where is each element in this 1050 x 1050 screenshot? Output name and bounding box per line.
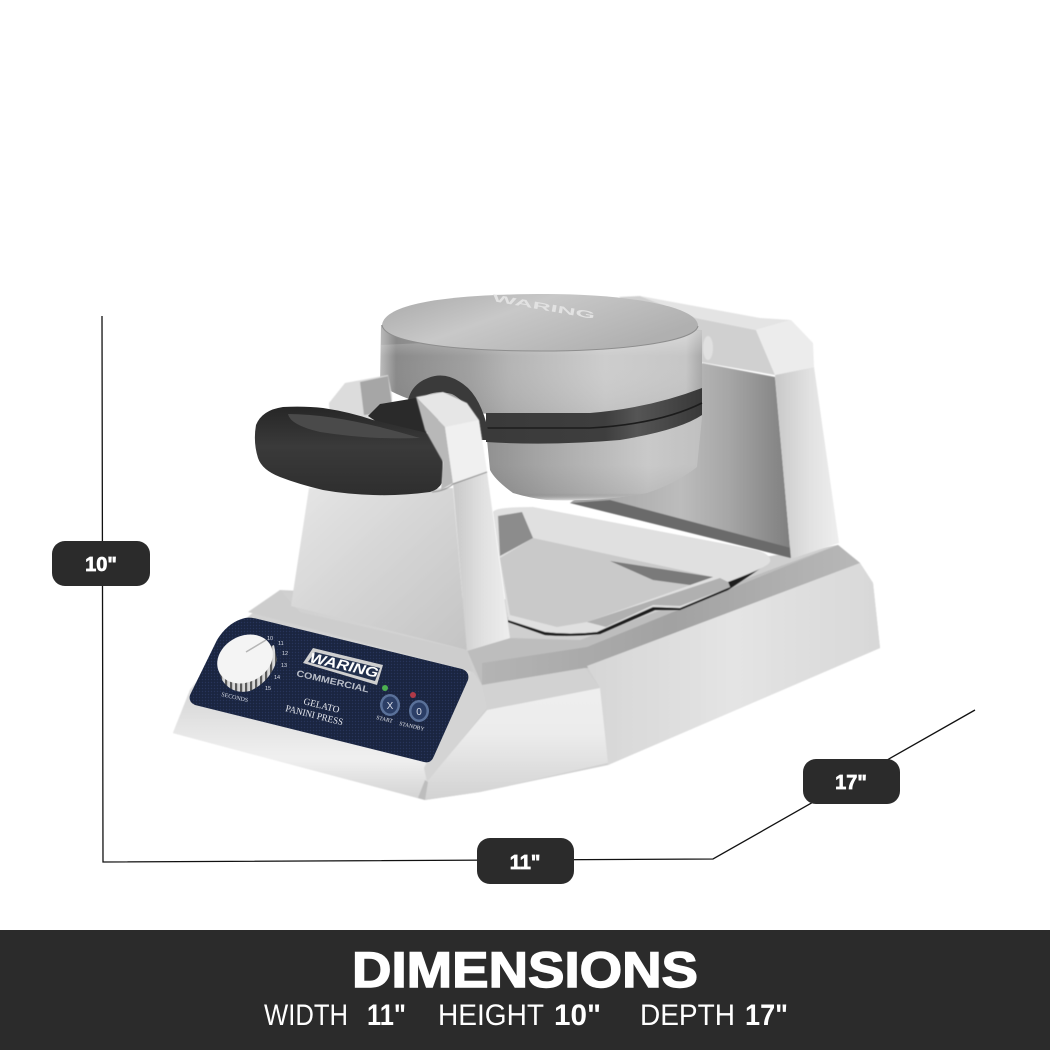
timer scale: 11: [278, 641, 284, 647]
handle bracket cap: [416, 392, 487, 492]
front facet around the panel: [173, 590, 473, 800]
dimension lines: [102, 316, 975, 862]
width callout: 11": [510, 852, 540, 874]
control panel: [190, 618, 468, 762]
start button: START: [376, 715, 394, 725]
drip tray: [493, 507, 770, 636]
standby button: [399, 692, 429, 733]
Waring logo: COMMERCIAL: [296, 668, 370, 695]
timer scale: 14: [274, 675, 280, 681]
footer title: DIMENSIONS: [352, 942, 698, 998]
base plinth: [173, 545, 880, 800]
left upright support: [291, 375, 510, 651]
timer scale: 10: [267, 636, 273, 642]
start button: [376, 685, 400, 725]
product name: PANINI PRESS: [284, 704, 344, 728]
upper lid with dark seal bands: [380, 293, 702, 444]
timer scale: [265, 636, 288, 692]
footer measurements: HEIGHT: [438, 999, 544, 1032]
lower cooking plate: [487, 412, 702, 500]
depth callout: [803, 759, 900, 804]
product name: GELATO: [302, 697, 341, 716]
engraved brand on lid: WARING: [491, 293, 596, 322]
top surface bevel: [467, 545, 860, 685]
start button: X: [387, 701, 394, 712]
timer scale: 12: [282, 651, 288, 657]
height callout: 10": [85, 554, 117, 576]
footer measurements: DEPTH: [640, 999, 735, 1032]
waffle maker product illustration: [173, 293, 880, 800]
right upright support: [570, 296, 839, 559]
height callout: [52, 541, 150, 586]
seconds label: SECONDS: [221, 692, 249, 704]
timer knob: [209, 625, 281, 693]
standby button: STANDBY: [399, 721, 425, 733]
footer measurements: 17": [745, 999, 788, 1032]
standby button: 0: [416, 707, 422, 718]
seal bands: [486, 388, 702, 444]
footer measurements: 10": [554, 999, 601, 1032]
Waring logo: [296, 648, 383, 695]
footer band: [0, 930, 1050, 1050]
timer scale: 13: [281, 663, 287, 669]
corner face: [425, 688, 608, 800]
width callout: [477, 838, 574, 884]
timer scale: 15: [265, 686, 271, 692]
right long face: [587, 563, 880, 765]
carrying handle: [255, 376, 490, 495]
footer measurements: 11": [367, 999, 406, 1032]
footer measurements: WIDTH: [264, 999, 348, 1032]
Waring logo: WARING: [308, 649, 380, 681]
depth callout: 17": [835, 772, 867, 794]
footer measurements: [264, 999, 788, 1032]
